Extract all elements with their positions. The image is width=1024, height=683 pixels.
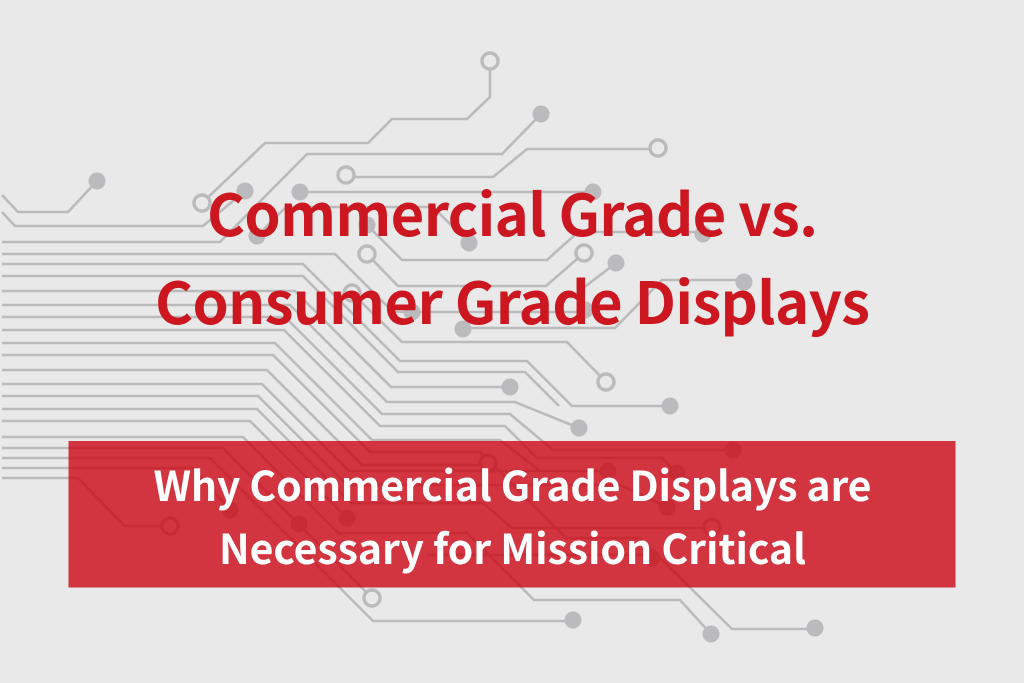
circuit trace lines bbox=[2, 61, 815, 634]
subtitle line 1: Why Commercial Grade Displays are bbox=[154, 453, 872, 513]
circuit ring node terminals bbox=[162, 53, 720, 606]
title bbox=[155, 169, 870, 341]
circuit board traces illustration bbox=[2, 53, 824, 642]
subtitle banner panel bbox=[68, 441, 956, 588]
banner subtitle text bbox=[154, 453, 872, 576]
title line 2: Consumer Grade Displays bbox=[155, 257, 870, 341]
title line 1: Commercial Grade vs. bbox=[207, 169, 818, 253]
subtitle line 2: Necessary for Mission Critical bbox=[219, 516, 806, 576]
circuit solid node dots bbox=[88, 106, 824, 642]
